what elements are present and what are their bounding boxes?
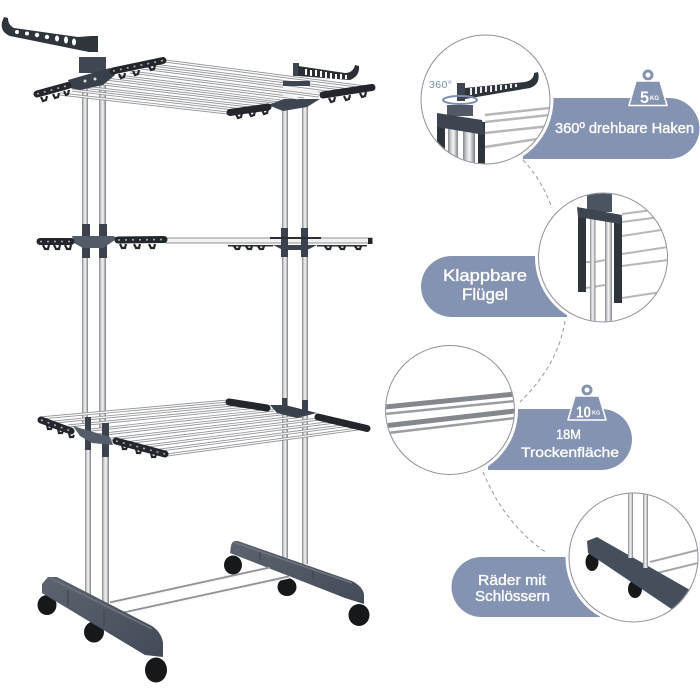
rear poles xyxy=(282,106,308,564)
middle shelf rail xyxy=(166,238,372,243)
top left mount block xyxy=(68,57,115,90)
detail circle 3 xyxy=(382,342,518,478)
weight icon 5 kg xyxy=(629,71,667,107)
label text 4: Räder mit xyxy=(478,573,546,589)
callout 2: folding wings xyxy=(421,190,671,326)
left base with wheels xyxy=(38,577,167,682)
top shelf xyxy=(2,17,372,118)
label text 3: 18M xyxy=(556,426,581,442)
detail circle 4 xyxy=(566,490,700,626)
top right bracket xyxy=(268,81,320,111)
weight icon 5 kg: 5 xyxy=(640,88,649,107)
lower shelf xyxy=(40,398,367,457)
pill label 1 xyxy=(523,98,699,159)
label text 1: 360º drehbare Haken xyxy=(555,120,694,137)
360 degree arrow xyxy=(443,96,477,104)
top left rotating hook arm xyxy=(2,17,98,52)
detail circle 1 xyxy=(418,32,554,168)
callout 3: drying area: Trockenfläche xyxy=(521,444,619,460)
callout 1: rotating hooks xyxy=(418,32,699,168)
top right rotating hook arm xyxy=(293,63,359,80)
main product: drying rack xyxy=(2,17,373,682)
middle left wings xyxy=(40,240,164,249)
lower connecting rails xyxy=(110,568,289,614)
callout 2: folding wings: Flügel xyxy=(462,286,508,304)
dashed connector lines xyxy=(483,160,565,553)
weight icon 10 kg: 10 xyxy=(576,404,591,422)
top shelf rails xyxy=(60,61,365,113)
callout 4: wheels with locks: Schlössern xyxy=(475,589,550,605)
lower left bracket and collars xyxy=(73,417,113,457)
front poles xyxy=(82,85,109,610)
top left wings xyxy=(37,60,163,101)
lower right bracket, collars and wings xyxy=(229,398,367,428)
pill label 3 xyxy=(488,409,632,470)
top right wings xyxy=(230,88,372,118)
label text 2: Klappbare xyxy=(443,267,527,285)
callout 4: wheels with locks xyxy=(452,490,700,626)
360 degree label: 360° xyxy=(429,79,452,91)
right base with wheels xyxy=(224,541,370,626)
pill label 2 xyxy=(421,256,567,317)
weight icon 10 kg xyxy=(568,386,606,422)
pill label 4 xyxy=(452,557,600,617)
callout 3: drying area xyxy=(382,342,632,478)
detail circle 2 xyxy=(535,190,671,326)
lower shelf rails xyxy=(40,401,365,455)
middle shelf xyxy=(40,224,372,258)
middle right bracket and collars xyxy=(228,228,372,257)
weight icon 10 kg: KG xyxy=(592,410,600,416)
lower left wings xyxy=(41,420,165,457)
weight icon 5 kg: KG xyxy=(650,96,659,102)
middle left bracket and collars xyxy=(72,224,118,258)
